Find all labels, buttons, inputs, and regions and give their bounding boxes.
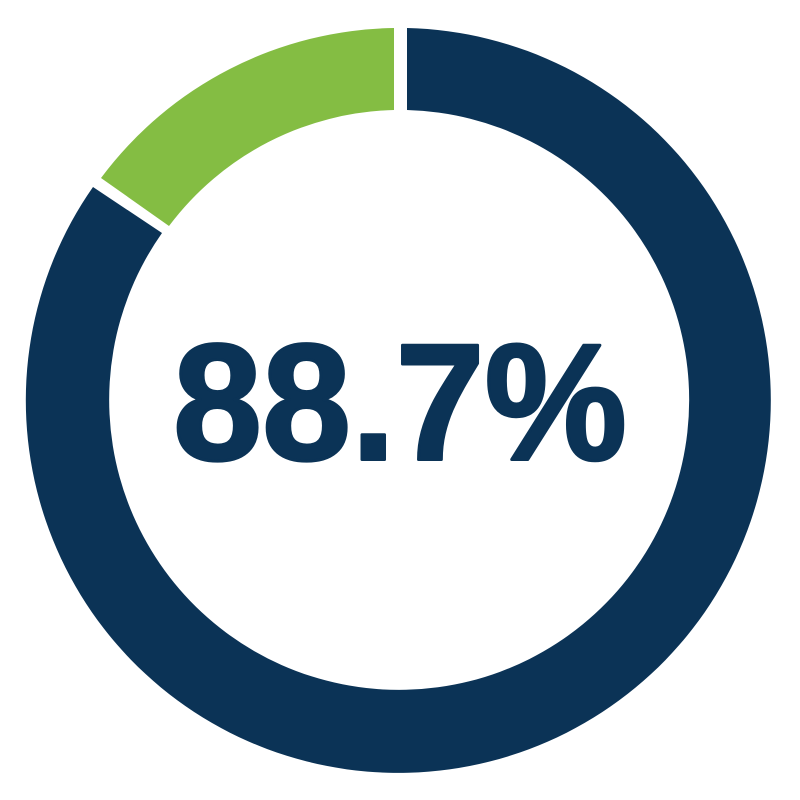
green ring segment xyxy=(101,28,394,226)
center percentage label: 88.7% xyxy=(173,310,627,496)
